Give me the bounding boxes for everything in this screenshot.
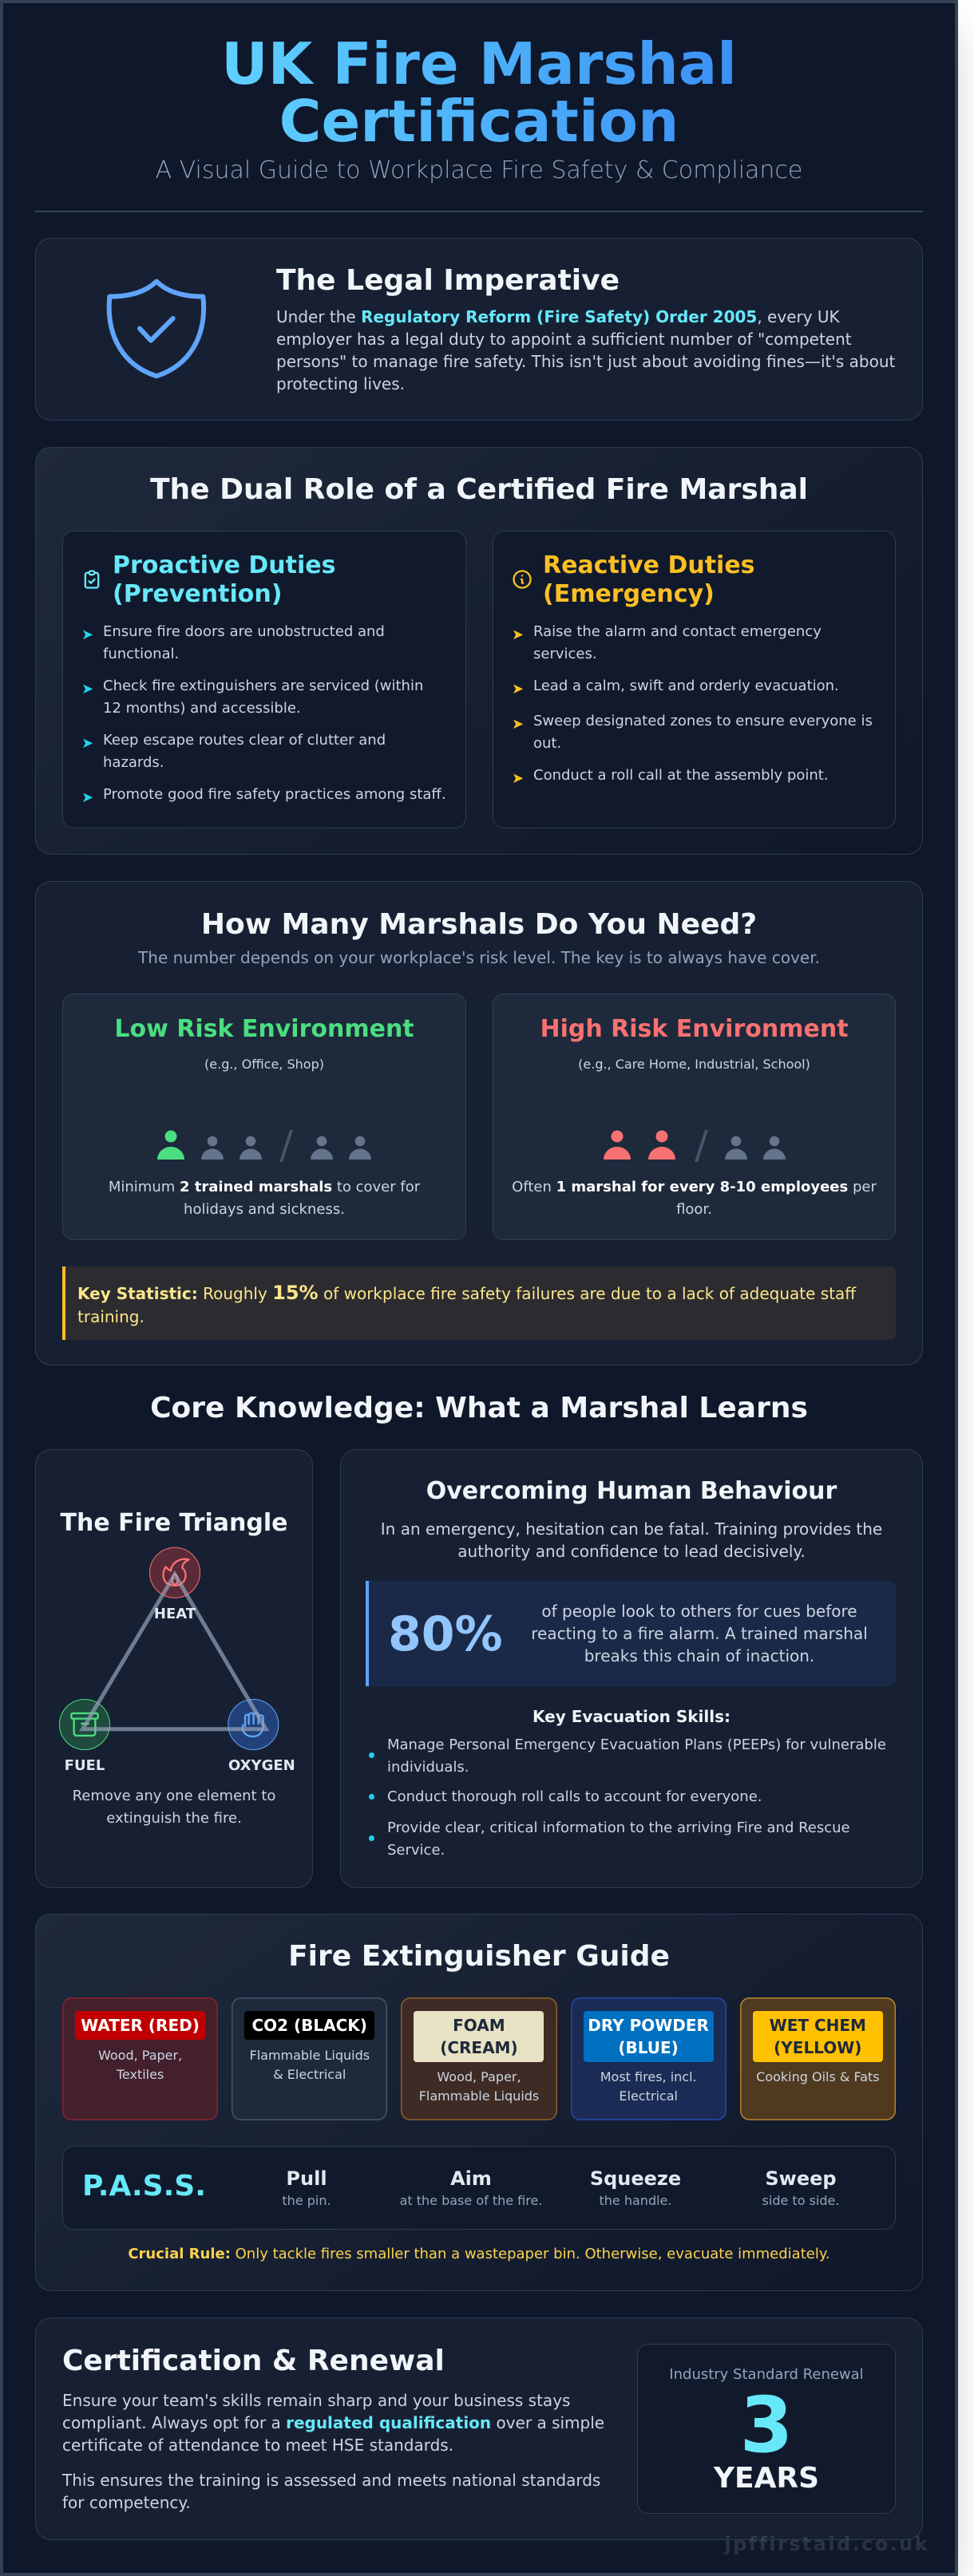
use bbox=[98, 2048, 182, 2082]
icon: fuel bbox=[59, 1700, 110, 1749]
body text: protecting lives. bbox=[276, 374, 405, 393]
list: reactive duties: Sweep designated zones to ensure everyone is bbox=[533, 713, 873, 729]
renewal box bbox=[637, 2344, 896, 2514]
list: proactive duties: ➤ bbox=[81, 626, 93, 643]
list: reactive duties: ➤ bbox=[512, 626, 524, 643]
callout: key statistic: training. bbox=[77, 1307, 145, 1326]
list: reactive duties: Lead a calm, swift and orderly evacuation. bbox=[533, 678, 839, 694]
triangle lines bbox=[83, 1574, 266, 1729]
heading: Reactive Duties bbox=[543, 551, 755, 579]
label bbox=[75, 2011, 205, 2040]
body text: Ensure your team's skills remain sharp and your business stays bbox=[62, 2391, 570, 2410]
use: Wood, Paper, bbox=[437, 2069, 521, 2084]
body text bbox=[62, 2391, 604, 2455]
icon: heat bbox=[150, 1547, 200, 1598]
card: high risk bbox=[493, 994, 896, 1240]
panel: the legal imperative bbox=[35, 238, 923, 421]
list: proactive duties: Ensure fire doors are unobstructed and bbox=[103, 623, 385, 640]
label: FOAM bbox=[453, 2016, 505, 2035]
panel: dual role bbox=[35, 447, 923, 855]
watermark: jpffirstaid.co.uk bbox=[724, 2533, 929, 2555]
body text: certificate of attendance to meet HSE standards. bbox=[62, 2436, 453, 2455]
label: (CREAM) bbox=[440, 2038, 518, 2057]
number: 3 bbox=[740, 2380, 793, 2470]
description: Minimum 2 trained marshals to cover for bbox=[109, 1179, 420, 1195]
step: squeeze: Squeeze bbox=[590, 2167, 681, 2190]
label bbox=[414, 2011, 544, 2062]
icon: shield with check bbox=[107, 279, 206, 378]
label: CO2 (BLACK) bbox=[251, 2016, 367, 2035]
list: proactive duties: functional. bbox=[103, 646, 179, 662]
step: squeeze: the handle. bbox=[600, 2193, 671, 2208]
heading: Certification & Renewal bbox=[62, 2345, 445, 2377]
list: proactive duties: ➤ bbox=[81, 681, 93, 697]
use: Flammable Liquids bbox=[419, 2088, 539, 2104]
extinguisher: foam bbox=[401, 1997, 557, 2120]
label: oxygen: OXYGEN bbox=[228, 1757, 295, 1774]
heading: Low Risk Environment bbox=[114, 1015, 414, 1043]
list: evacuation skills: Conduct thorough roll calls to account for everyone. bbox=[387, 1788, 762, 1805]
label: WET CHEM bbox=[770, 2016, 866, 2035]
use bbox=[600, 2069, 697, 2104]
body text bbox=[276, 307, 895, 393]
step: aim: Aim bbox=[450, 2167, 492, 2190]
body text: Under the Regulatory Reform (Fire Safety) Order 2005, every UK bbox=[276, 307, 840, 326]
title: Certification bbox=[279, 88, 679, 155]
icon: info circle bbox=[513, 570, 532, 589]
stat number: 80% bbox=[388, 1606, 503, 1662]
heading: (Emergency) bbox=[543, 580, 715, 608]
description bbox=[109, 1179, 420, 1218]
use: & Electrical bbox=[273, 2067, 346, 2082]
list: reactive duties: ➤ bbox=[512, 770, 524, 787]
intro text: In an emergency, hesitation can be fatal. Training provides the bbox=[381, 1519, 882, 1539]
description bbox=[512, 1179, 877, 1218]
list: proactive duties: ➤ bbox=[81, 735, 93, 752]
example: (e.g., Office, Shop) bbox=[204, 1057, 324, 1072]
use: Electrical bbox=[619, 2088, 678, 2104]
extinguisher: wet chem bbox=[740, 1997, 896, 2120]
diagram: fire triangle bbox=[59, 1547, 279, 1750]
step: sweep: side to side. bbox=[762, 2193, 839, 2208]
list: reactive duties: ➤ bbox=[512, 716, 524, 733]
list: proactive duties: hazards. bbox=[103, 754, 164, 771]
label bbox=[584, 2011, 714, 2062]
heading: How Many Marshals Do You Need? bbox=[201, 908, 757, 941]
list: reactive duties: services. bbox=[533, 646, 597, 662]
icon: clipboard check bbox=[85, 570, 99, 589]
use bbox=[419, 2069, 539, 2104]
list: proactive duties: Check fire extinguishers are serviced (within bbox=[103, 678, 423, 694]
body text: This ensures the training is assessed and meets national standards bbox=[62, 2471, 600, 2490]
step: sweep bbox=[762, 2167, 839, 2208]
heading bbox=[543, 551, 755, 608]
label: heat: HEAT bbox=[154, 1606, 196, 1622]
heading: High Risk Environment bbox=[540, 1015, 849, 1043]
icon: oxygen bbox=[228, 1700, 279, 1749]
body text: employer has a legal duty to appoint a sufficient number of "competent bbox=[276, 330, 852, 349]
label: fuel: FUEL bbox=[65, 1757, 105, 1774]
step: aim: at the base of the fire. bbox=[400, 2193, 542, 2208]
stat text: of people look to others for cues before bbox=[541, 1602, 857, 1621]
step: aim bbox=[400, 2167, 542, 2208]
subheading: Key Evacuation Skills: bbox=[533, 1707, 730, 1726]
list: proactive duties: Keep escape routes clear of clutter and bbox=[103, 732, 386, 749]
icon row: people bbox=[157, 1130, 371, 1162]
list: reactive duties bbox=[512, 623, 873, 787]
stat text bbox=[531, 1602, 868, 1665]
list: evacuation skills bbox=[369, 1736, 886, 1859]
unit: YEARS bbox=[714, 2462, 819, 2495]
label: Industry Standard Renewal bbox=[669, 2366, 864, 2383]
card: low risk bbox=[62, 994, 466, 1240]
use bbox=[249, 2048, 370, 2082]
extinguisher: water bbox=[62, 1997, 218, 2120]
acronym: P.A.S.S. bbox=[82, 2170, 206, 2203]
heading: The Fire Triangle bbox=[61, 1509, 287, 1537]
step: pull: the pin. bbox=[282, 2193, 331, 2208]
body text: for competency. bbox=[62, 2493, 191, 2512]
list: proactive duties: 12 months) and accessible. bbox=[103, 700, 301, 717]
panel: P.A.S.S. bbox=[62, 2146, 896, 2230]
heading: core knowledge: Core Knowledge: What a Marshal Learns bbox=[150, 1392, 808, 1424]
heading: The Legal Imperative bbox=[276, 264, 620, 297]
list: evacuation skills: Service. bbox=[387, 1842, 445, 1859]
list: evacuation skills: Provide clear, critical information to the arriving Fire and Rescue bbox=[387, 1819, 850, 1836]
example: (e.g., Care Home, Industrial, School) bbox=[578, 1057, 810, 1072]
label bbox=[753, 2011, 883, 2062]
icon row: people bbox=[604, 1130, 786, 1162]
body text: compliant. Always opt for a regulated qualification over a simple bbox=[62, 2413, 604, 2432]
description: floor. bbox=[676, 1201, 712, 1218]
step: pull: Pull bbox=[286, 2167, 327, 2190]
use: Wood, Paper, bbox=[98, 2048, 182, 2063]
panel: fire triangle bbox=[35, 1449, 313, 1888]
stat box: 80% bbox=[366, 1581, 896, 1686]
description: holidays and sickness. bbox=[184, 1201, 345, 1218]
label: (YELLOW) bbox=[774, 2038, 861, 2057]
extinguisher: dry powder bbox=[571, 1997, 727, 2120]
subheading: The number depends on your workplace's risk level. The key is to always have cover. bbox=[138, 948, 820, 967]
list: proactive duties: ➤ bbox=[81, 789, 93, 806]
list: reactive duties: Raise the alarm and contact emergency bbox=[533, 623, 822, 640]
use: Flammable Liquids bbox=[249, 2048, 370, 2063]
list: reactive duties: out. bbox=[533, 735, 561, 752]
panel: overcoming human behaviour bbox=[340, 1449, 923, 1888]
use: Most fires, incl. bbox=[600, 2069, 697, 2084]
caption: extinguish the fire. bbox=[106, 1810, 242, 1827]
list: proactive duties: Promote good fire safety practices among staff. bbox=[103, 786, 446, 803]
step: pull bbox=[282, 2167, 331, 2208]
crucial rule: Crucial Rule: Only tackle fires smaller than a wastepaper bin. Otherwise, evacuate immediately. bbox=[128, 2246, 830, 2262]
heading: The Dual Role of a Certified Fire Marshal bbox=[150, 473, 808, 506]
intro text: authority and confidence to lead decisively. bbox=[457, 1542, 806, 1561]
heading: (Prevention) bbox=[113, 580, 282, 608]
use: Cooking Oils & Fats bbox=[756, 2069, 880, 2084]
body text bbox=[62, 2471, 600, 2512]
heading bbox=[113, 551, 335, 608]
label: (BLUE) bbox=[618, 2038, 679, 2057]
card: reactive duties bbox=[493, 531, 896, 828]
stat text: reacting to a fire alarm. A trained marshal bbox=[531, 1624, 868, 1643]
label bbox=[244, 2011, 374, 2040]
caption: Remove any one element to bbox=[73, 1788, 275, 1804]
title: UK Fire Marshal bbox=[221, 30, 737, 97]
description: Often 1 marshal for every 8-10 employees per bbox=[512, 1179, 877, 1195]
step: squeeze bbox=[590, 2167, 681, 2208]
body text: persons" to manage fire safety. This isn't just about avoiding fines—it's about bbox=[276, 352, 895, 371]
heading: Proactive Duties bbox=[113, 551, 335, 579]
list: proactive duties bbox=[81, 623, 446, 806]
label: DRY POWDER bbox=[588, 2016, 709, 2035]
callout: key statistic bbox=[62, 1266, 896, 1340]
extinguisher: co2 bbox=[232, 1997, 387, 2120]
heading: Fire Extinguisher Guide bbox=[288, 1940, 670, 1973]
list: evacuation skills: Manage Personal Emergency Evacuation Plans (PEEPs) for vulnerable bbox=[387, 1736, 886, 1753]
callout: key statistic: Key Statistic: Roughly 15% of workplace fire safety failures are due to a lack of adequate staff bbox=[77, 1282, 856, 1304]
panel: certification and renewal bbox=[35, 2317, 923, 2540]
list: evacuation skills: individuals. bbox=[387, 1759, 469, 1776]
intro text bbox=[381, 1519, 882, 1561]
panel: how many marshals bbox=[35, 881, 923, 1365]
list: reactive duties: ➤ bbox=[512, 681, 524, 697]
step: sweep: Sweep bbox=[765, 2167, 837, 2190]
caption bbox=[73, 1788, 275, 1827]
use: Textiles bbox=[117, 2067, 164, 2082]
card: proactive duties bbox=[62, 531, 466, 828]
subtitle: A Visual Guide to Workplace Fire Safety & Compliance bbox=[156, 156, 802, 184]
label: WATER (RED) bbox=[81, 2016, 200, 2035]
title bbox=[221, 30, 737, 155]
stat text: breaks this chain of inaction. bbox=[584, 1646, 814, 1665]
list: reactive duties: Conduct a roll call at the assembly point. bbox=[533, 767, 829, 784]
panel: fire extinguisher guide bbox=[35, 1914, 923, 2291]
heading: Overcoming Human Behaviour bbox=[426, 1477, 837, 1505]
